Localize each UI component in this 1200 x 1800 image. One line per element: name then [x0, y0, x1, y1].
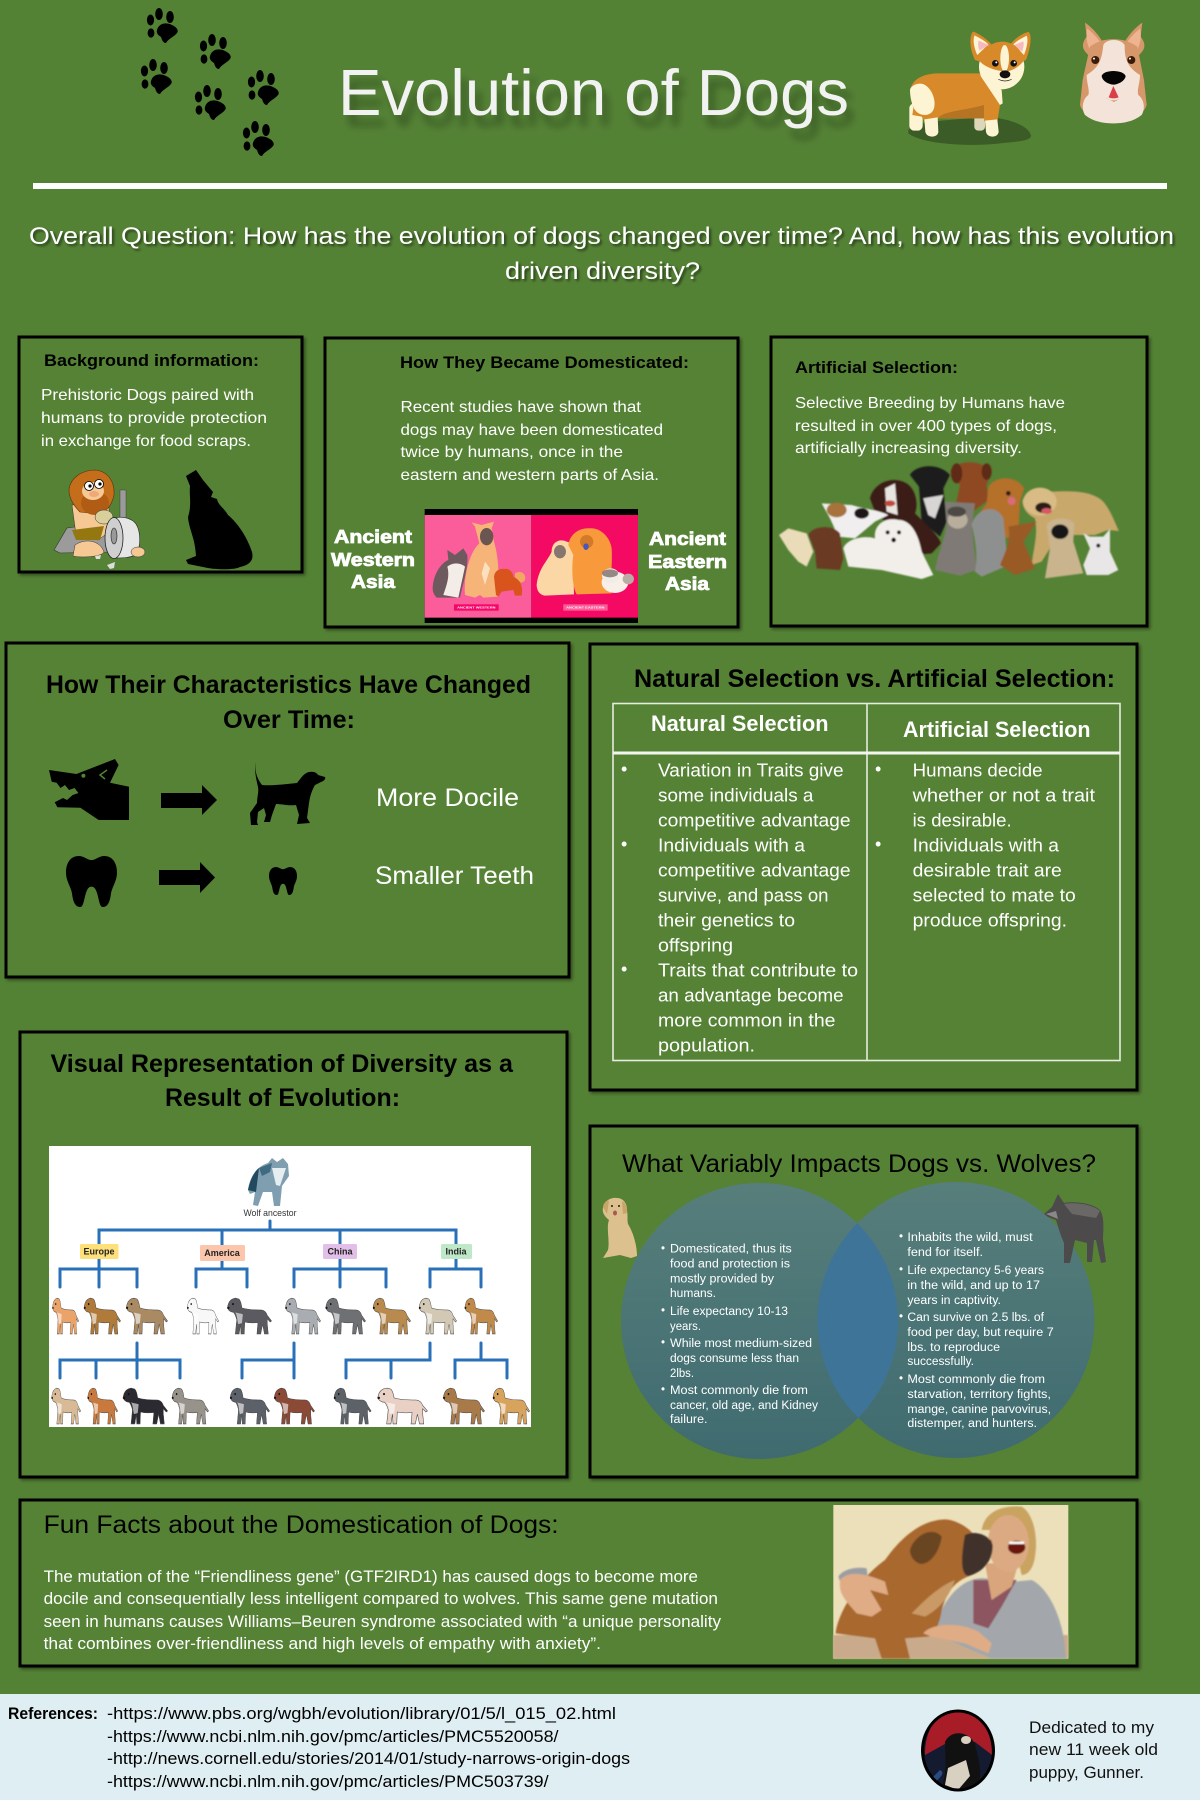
text block: artificial selection: resulted in over 400 types of dogs, — [795, 418, 1057, 435]
region tags: China — [327, 1246, 353, 1256]
column: natural selection points: • — [621, 959, 627, 979]
text block: dogs: humans. — [670, 1288, 716, 1300]
label: ancient eastern asia — [648, 529, 727, 594]
text block: dogs: 2lbs. — [670, 1368, 694, 1380]
heading: visual representation — [50, 1050, 514, 1112]
panel: how they became domesticated — [325, 338, 738, 627]
arrow: wolf to dog — [161, 785, 217, 815]
heading: characteristics — [46, 671, 531, 734]
label: wolf ancestor: Wolf ancestor — [244, 1208, 296, 1219]
heading: visual representation: Visual Representation of Diversity as a — [50, 1050, 514, 1078]
column: natural selection points: competitive advantage — [658, 861, 851, 881]
column: natural selection points: offspring — [658, 936, 733, 956]
dedication text: puppy, Gunner. — [1029, 1764, 1144, 1782]
icon: grey wolf — [1044, 1194, 1106, 1263]
column: natural selection points: some individuals a — [658, 786, 814, 806]
text block: wolves: lbs. to reproduce — [907, 1342, 1000, 1354]
column: natural selection points: population. — [658, 1036, 755, 1056]
text block: wolves: in the wild, and up to 17 — [907, 1280, 1040, 1292]
text block: dogs: • — [661, 1384, 665, 1396]
icon: corgi — [908, 32, 1031, 145]
text block: fun facts: The mutation of the “Friendliness gene” (GTF2IRD1) has caused dogs to become more — [44, 1568, 698, 1586]
text block: wolves: • — [899, 1264, 903, 1276]
footer band — [0, 1694, 1200, 1800]
text block: dogs: Domesticated, thus its — [670, 1244, 792, 1256]
column: artificial selection points: whether or not a trait — [912, 786, 1095, 806]
label: ancient eastern asia: Asia — [665, 574, 710, 594]
heading: characteristics: Over Time: — [223, 706, 355, 734]
panel: fun facts — [20, 1500, 1137, 1666]
text block: dogs: • — [661, 1305, 665, 1317]
icon: large tooth — [66, 856, 117, 907]
text block: wolves: mange, canine parvovirus, — [907, 1404, 1051, 1416]
text block: dogs: Most commonly die from — [670, 1385, 808, 1397]
tree branches — [60, 1221, 507, 1378]
text block: wolves: successfully. — [907, 1356, 974, 1368]
panel: visual representation of diversity — [20, 1032, 567, 1477]
column: artificial selection points — [875, 759, 1095, 931]
region tags: India — [445, 1246, 467, 1256]
text block: wolves: fend for itself. — [907, 1247, 983, 1259]
illustration: man laughing with dog — [833, 1505, 1068, 1659]
text block: wolves: • — [899, 1231, 903, 1243]
icon: boxer dog head — [1080, 23, 1147, 123]
chart: dog family tree — [49, 1146, 531, 1427]
label: more docile: More Docile — [376, 784, 519, 812]
text block: background: in exchange for food scraps. — [41, 433, 251, 450]
panel: how their characteristics have changed — [6, 643, 569, 977]
column: artificial selection points: Individuals with a — [913, 836, 1060, 856]
column: natural selection points: survive, and pass on — [658, 886, 828, 906]
text block: dogs — [661, 1243, 818, 1426]
text block: domestication: eastern and western parts of Asia. — [400, 467, 659, 484]
column: natural selection points: an advantage become — [658, 986, 844, 1006]
icon: docile dog silhouette — [250, 762, 325, 825]
icon: small tooth — [269, 867, 297, 895]
text block: dogs: cancer, old age, and Kidney — [670, 1400, 818, 1412]
label: ancient western asia: Western — [331, 550, 415, 570]
arrow: large tooth to small tooth — [159, 862, 215, 893]
column: artificial selection points: • — [875, 759, 881, 779]
text block: fun facts: seen in humans causes Williams–Beuren syndrome associated with “a unique personality — [44, 1613, 722, 1631]
text block: wolves: Most commonly die from — [907, 1374, 1045, 1386]
references list: -http://news.cornell.edu/stories/2014/01/study-narrows-origin-dogs — [107, 1750, 630, 1768]
column: artificial selection points: selected to mate to — [913, 886, 1076, 906]
panel: artificial selection — [771, 337, 1147, 626]
icon: howling wolf silhouette — [186, 470, 252, 569]
column: artificial selection points: • — [875, 834, 881, 854]
region tags: Europe — [83, 1246, 115, 1256]
label: ancient eastern asia: Ancient — [649, 529, 726, 549]
heading: dogs vs wolves: What Variably Impacts Dogs vs. Wolves? — [622, 1150, 1096, 1178]
dog breeds: second row — [51, 1388, 530, 1424]
table header: natural selection: Natural Selection — [651, 711, 828, 736]
text block: fun facts: docile and consequentially less intelligent compared to wolves. This same gene mutation — [44, 1590, 718, 1608]
heading: background information: Background information: — [44, 351, 259, 370]
text block: dogs: While most medium-sized — [670, 1338, 812, 1350]
column: artificial selection points: is desirable. — [913, 811, 1012, 831]
text block: dogs: failure. — [670, 1414, 708, 1426]
text block: background: Prehistoric Dogs paired with — [41, 387, 254, 404]
heading: artificial selection: Artificial Selection: — [795, 358, 958, 377]
title: Evolution of Dogs — [338, 56, 849, 129]
column: natural selection points: • — [621, 834, 627, 854]
text block: wolves — [899, 1231, 1054, 1430]
text block: dogs: • — [661, 1243, 665, 1255]
text block: domestication: twice by humans, once in the — [400, 444, 623, 461]
column: natural selection points: Traits that contribute to — [658, 961, 858, 981]
text block: dogs: Life expectancy 10-13 — [670, 1306, 788, 1318]
dedication text: new 11 week old — [1029, 1741, 1158, 1759]
column: natural selection points: their genetics to — [658, 911, 795, 931]
text block: background — [41, 387, 267, 450]
heading: visual representation: Result of Evolution: — [165, 1084, 400, 1112]
heading: natural vs artificial: Natural Selection vs. Artificial Selection: — [634, 665, 1115, 693]
text block: wolves: • — [899, 1311, 903, 1323]
text block: dogs: years. — [670, 1321, 701, 1333]
label: ancient western asia: Asia — [351, 572, 396, 592]
text block: wolves: Life expectancy 5-6 years — [907, 1265, 1044, 1277]
text block: domestication: dogs may have been domesticated — [400, 422, 663, 439]
text block: dogs: mostly provided by — [670, 1274, 774, 1286]
text block: wolves: • — [899, 1373, 903, 1385]
text block: wolves: years in captivity. — [907, 1295, 1001, 1307]
text block: fun facts: that combines over-friendliness and high levels of empathy with anxiety”. — [44, 1635, 601, 1653]
illustration: group of dog breeds — [779, 462, 1119, 579]
text block: wolves: food per day, but require 7 — [907, 1327, 1054, 1339]
panel: background information — [19, 337, 302, 572]
text block: wolves: Can survive on 2.5 lbs. of — [907, 1312, 1045, 1324]
text block: dogs: food and protection is — [670, 1259, 790, 1271]
text block: wolves: distemper, and hunters. — [907, 1418, 1037, 1430]
text block: dogs: dogs consume less than — [670, 1353, 799, 1365]
dedication text: Dedicated to my — [1029, 1719, 1155, 1737]
icon: snarling wolf head — [49, 759, 129, 820]
text block: fun facts — [44, 1568, 722, 1653]
venn diagram circles — [621, 1182, 1094, 1459]
text block: wolves: Inhabits the wild, must — [907, 1232, 1033, 1244]
text block: artificial selection: Selective Breeding by Humans have — [795, 395, 1065, 412]
text block: artificial selection: artificially increasing diversity. — [795, 440, 1022, 457]
panel: dogs vs wolves venn diagram — [590, 1126, 1137, 1477]
text block: domestication — [400, 399, 663, 484]
illustration: ancient western and eastern dogs: ANCIENT WESTERN — [457, 606, 496, 610]
label: ancient eastern asia: Eastern — [648, 552, 727, 572]
icon: wolf ancestor — [248, 1158, 289, 1206]
references list: -https://www.ncbi.nlm.nih.gov/pmc/articles/PMC5520058/ — [107, 1728, 559, 1746]
label: ancient western asia: Ancient — [334, 527, 412, 547]
region tags: America — [204, 1248, 241, 1258]
photo: puppy Gunner — [920, 1710, 996, 1792]
column: natural selection points — [621, 759, 858, 1056]
references list: -https://www.pbs.org/wgbh/evolution/library/01/5/l_015_02.html — [107, 1705, 616, 1723]
icon: caveman carving a stone wheel — [54, 470, 145, 569]
references list — [107, 1705, 630, 1791]
dedication text — [1029, 1719, 1158, 1782]
table header: artificial selection: Artificial Selection — [903, 717, 1090, 742]
icon: golden retriever — [603, 1198, 637, 1258]
heading: fun facts: Fun Facts about the Domestication of Dogs: — [44, 1511, 559, 1539]
column: natural selection points: • — [621, 759, 627, 779]
text block: wolves: starvation, territory fights, — [907, 1389, 1051, 1401]
column: natural selection points: competitive advantage — [658, 811, 851, 831]
label: smaller teeth: Smaller Teeth — [375, 862, 534, 890]
region tags — [80, 1244, 472, 1261]
heading: characteristics: How Their Characteristics Have Changed — [46, 671, 531, 699]
overall question: driven diversity? — [505, 258, 700, 285]
column: natural selection points: Individuals with a — [658, 836, 806, 856]
heading: domestication: How They Became Domesticated: — [400, 353, 689, 372]
references heading: References: — [8, 1705, 98, 1723]
column: artificial selection points: desirable trait are — [913, 861, 1062, 881]
illustration: ancient western and eastern dogs — [425, 509, 638, 623]
column: natural selection points: more common in the — [658, 1011, 836, 1031]
comparison table — [613, 703, 1120, 1061]
overall question: Overall Question: How has the evolution of dogs changed over time? And, how has this evolution — [29, 223, 1174, 250]
overall question — [29, 223, 1174, 285]
illustration: ancient western and eastern dogs: ANCIENT EASTERN — [566, 606, 605, 610]
column: natural selection points: Variation in Traits give — [658, 761, 844, 781]
panel: natural vs artificial selection — [590, 644, 1137, 1090]
text block: domestication: Recent studies have shown that — [400, 399, 642, 416]
label: ancient western asia — [331, 527, 415, 592]
dog breeds: first row — [52, 1298, 498, 1334]
text block: background: humans to provide protection — [41, 410, 267, 427]
text block: artificial selection — [795, 395, 1065, 457]
divider: title rule — [33, 183, 1167, 189]
column: artificial selection points: produce offspring. — [913, 911, 1067, 931]
references list: -https://www.ncbi.nlm.nih.gov/pmc/articles/PMC503739/ — [107, 1773, 549, 1791]
icons: paw prints — [141, 8, 279, 156]
column: artificial selection points: Humans decide — [913, 761, 1042, 781]
text block: dogs: • — [661, 1337, 665, 1349]
